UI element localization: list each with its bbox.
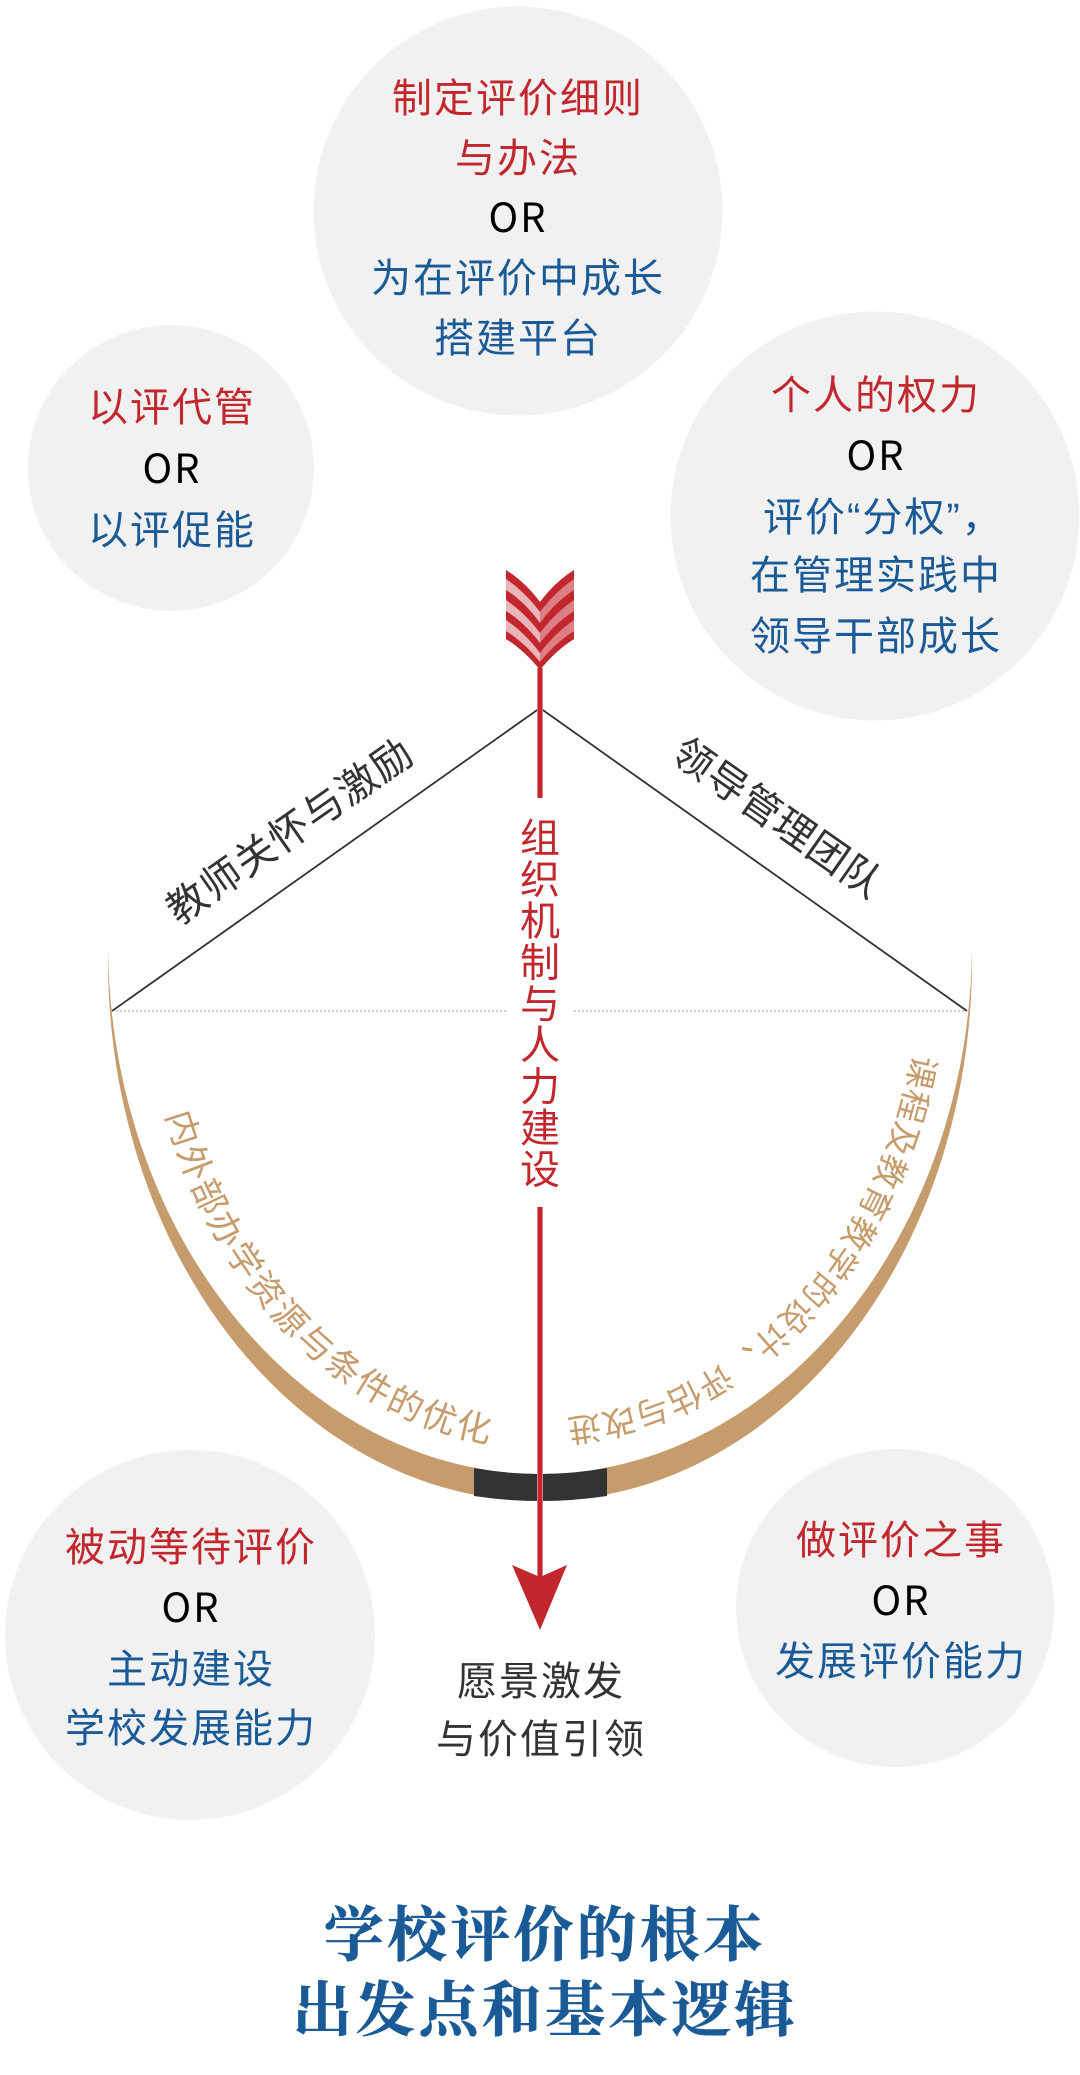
title: 学校评价的根本	[324, 1888, 766, 1974]
panel: bottom right circle: 发展评价能力	[775, 1629, 1027, 1687]
bow string lines	[112, 708, 967, 1011]
arrow head	[512, 1565, 567, 1630]
panel: bottom left circle: 学校发展能力	[65, 1696, 317, 1754]
panel: right circle	[670, 312, 1080, 720]
panel: top circle: 为在评价中成长	[371, 246, 665, 304]
panel: bottom left circle: OR	[161, 1576, 221, 1634]
panel: top circle: 搭建平台	[434, 306, 602, 364]
panel: right circle: OR	[846, 424, 906, 482]
panel: bottom right circle	[736, 1449, 1054, 1767]
label: vision: 与价值引领	[436, 1707, 646, 1765]
panel: left circle	[28, 325, 314, 611]
panel: bottom right circle: OR	[871, 1569, 931, 1627]
arrow fletching	[506, 570, 574, 670]
panel: left circle: 以评促能	[88, 498, 256, 556]
label: leadership team: 领导管理团队	[662, 721, 897, 910]
panel: top circle	[314, 6, 722, 416]
label: vertical centre: 组织机制与人力建设	[511, 817, 569, 1190]
panel: bottom left circle: 主动建设	[107, 1637, 275, 1695]
panel: top circle: 与办法	[455, 126, 581, 184]
label: vision: 愿景激发	[457, 1649, 625, 1707]
label: curved right: 课程及教育教学的设计、评估与改进	[568, 1058, 939, 1446]
title	[292, 1888, 798, 2049]
bow grip	[474, 1468, 607, 1501]
panel: top circle: OR	[488, 186, 548, 244]
panel: left circle: OR	[142, 437, 202, 495]
panel: right circle: 评价“分权”，	[763, 485, 1004, 543]
label: curved left: 内外部办学资源与条件的优化	[164, 1111, 491, 1444]
panel: right circle: 领导干部成长	[750, 604, 1002, 662]
bow body	[108, 950, 972, 1501]
panel: bottom right circle: 做评价之事	[796, 1508, 1006, 1566]
panel: bottom left circle	[5, 1450, 375, 1820]
label: teacher care: 教师关怀与激励	[153, 721, 424, 936]
arrow shaft lower	[537, 1207, 543, 1577]
panel: right circle: 在管理实践中	[750, 543, 1002, 601]
arrow	[506, 570, 574, 1630]
label: vision	[436, 1649, 646, 1765]
title: 出发点和基本逻辑	[292, 1963, 798, 2049]
panel: left circle: 以评代管	[88, 375, 256, 433]
panel: bottom left circle: 被动等待评价	[65, 1515, 317, 1573]
panel: top circle: 制定评价细则	[392, 66, 644, 124]
panel: right circle: 个人的权力	[771, 363, 981, 421]
dotted chord	[116, 1010, 966, 1012]
arrow shaft upper	[537, 668, 543, 798]
